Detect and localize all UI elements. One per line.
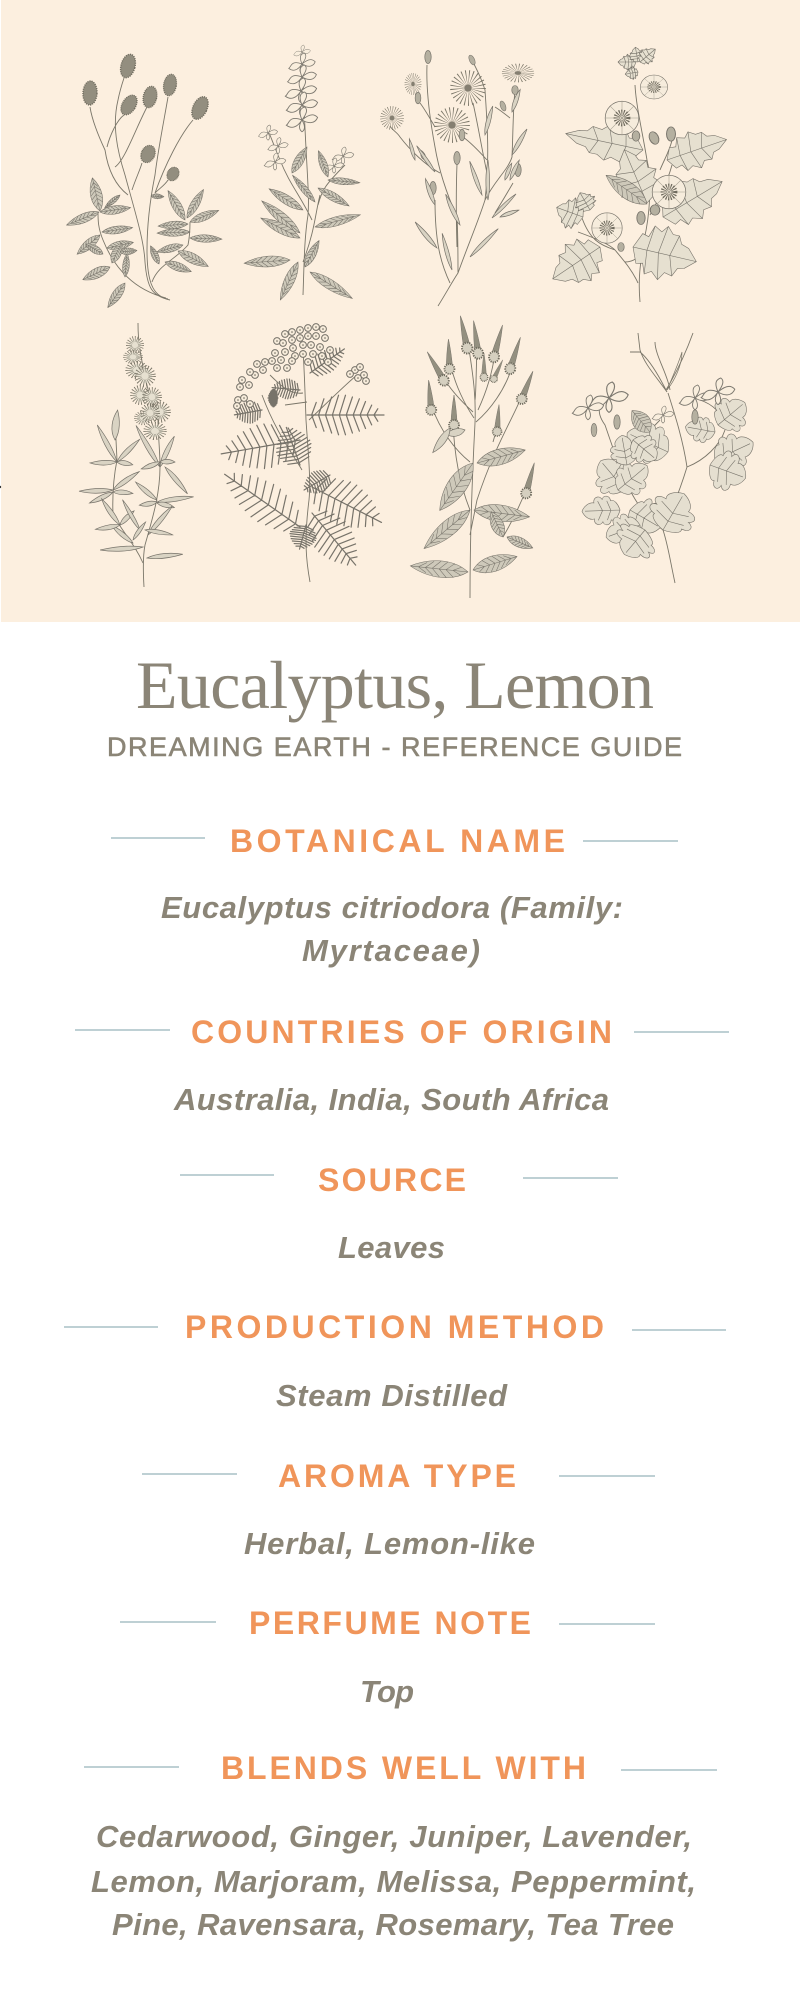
- value: Pine, Ravensara, Rosemary, Tea Tree: [112, 1907, 674, 1942]
- heading: PERFUME NOTE: [249, 1605, 531, 1641]
- section: perfume note: [120, 1605, 655, 1709]
- value: Leaves: [338, 1230, 445, 1265]
- value: Cedarwood, Ginger, Juniper, Lavender,: [96, 1819, 692, 1854]
- illustration: cornflower plant: [385, 50, 528, 306]
- section: aroma type: [142, 1458, 655, 1561]
- value: Australia, India, South Africa: [173, 1082, 609, 1117]
- heading rule right: [621, 1769, 717, 1771]
- heading: BOTANICAL NAME: [230, 823, 565, 859]
- heading: SOURCE: [318, 1162, 466, 1198]
- subtitle: DREAMING EARTH - REFERENCE GUIDE: [107, 732, 682, 762]
- heading rule right: [559, 1623, 655, 1625]
- illustration: burnet plant: [65, 53, 222, 310]
- heading: COUNTRIES OF ORIGIN: [191, 1014, 612, 1050]
- value: Myrtaceae): [302, 933, 480, 968]
- heading: BLENDS WELL WITH: [221, 1750, 586, 1786]
- heading rule left: [84, 1766, 179, 1768]
- heading rule left: [180, 1174, 274, 1176]
- illustration: tansy plant: [213, 324, 391, 582]
- heading rule right: [634, 1031, 729, 1033]
- value: Eucalyptus citriodora (Family:: [161, 890, 623, 925]
- heading rule left: [111, 837, 205, 839]
- heading rule right: [559, 1475, 655, 1477]
- heading rule right: [523, 1177, 618, 1179]
- value: Herbal, Lemon-like: [244, 1526, 535, 1561]
- illustration: mallow plant: [541, 43, 733, 302]
- illustration: celandine plant: [572, 333, 761, 583]
- panel: botanical illustrations: [0, 0, 800, 622]
- section: countries of origin: [75, 1014, 729, 1117]
- heading rule left: [142, 1473, 237, 1475]
- panel background: [1, 0, 800, 622]
- value: [91, 1819, 696, 1942]
- section: production method: [64, 1309, 726, 1413]
- heading rule right: [583, 840, 678, 842]
- heading: AROMA TYPE: [278, 1458, 516, 1494]
- heading rule left: [120, 1621, 216, 1623]
- value: Steam Distilled: [276, 1378, 508, 1413]
- section: blends well with: [84, 1750, 717, 1942]
- heading rule right: [632, 1329, 726, 1331]
- illustration: rosemary-like plant: [79, 323, 194, 587]
- illustration: verbena plant: [409, 315, 539, 598]
- value: Top: [360, 1674, 414, 1709]
- title: Eucalyptus, Lemon: [136, 647, 654, 723]
- heading rule left: [75, 1029, 170, 1031]
- value: [161, 890, 623, 968]
- section: botanical name: [111, 823, 678, 968]
- heading rule left: [64, 1326, 158, 1328]
- edge mark: [0, 486, 1, 488]
- heading: PRODUCTION METHOD: [185, 1309, 604, 1345]
- value: Lemon, Marjoram, Melissa, Peppermint,: [91, 1864, 696, 1899]
- section: source: [180, 1162, 618, 1265]
- illustration: sage plant: [244, 45, 362, 303]
